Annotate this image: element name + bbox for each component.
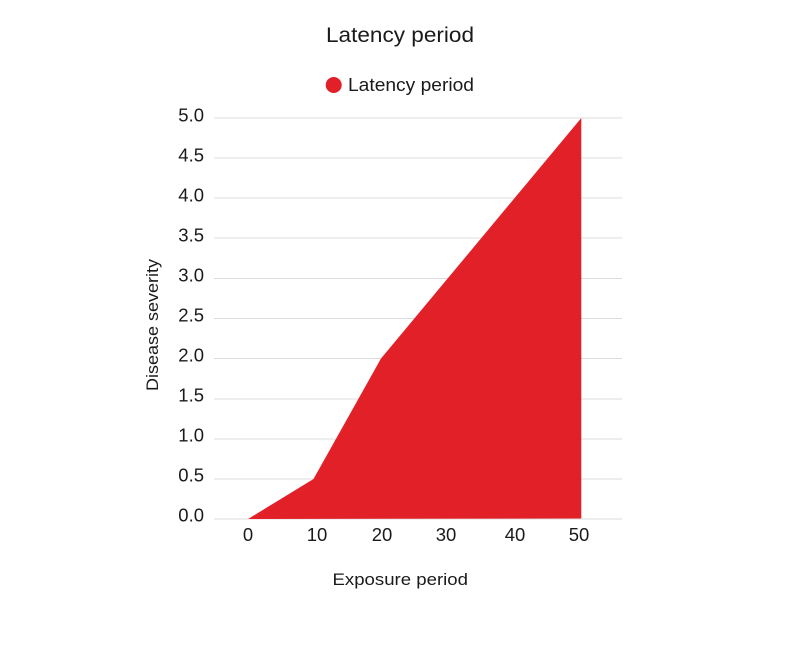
y axis labels: 3.0 [178,264,204,286]
y axis title: Disease severity [143,258,162,391]
y axis labels: 4.5 [178,144,204,166]
title: Latency period [326,24,474,47]
x axis labels: 20 [372,524,392,545]
y axis labels: 0.5 [178,464,204,486]
x axis labels: 10 [307,524,327,545]
y axis labels: 0.0 [178,504,204,526]
y axis labels: 1.5 [178,384,204,406]
y axis labels [178,104,204,526]
y axis labels: 1.0 [178,424,204,446]
y axis labels: 2.5 [178,304,204,326]
y axis labels: 5.0 [178,104,204,126]
y axis labels: 3.5 [178,224,204,246]
x axis labels: 0 [243,524,253,545]
x axis labels [243,524,589,545]
x axis labels: 40 [505,524,525,545]
legend: Latency period [348,75,474,95]
y axis labels: 4.0 [178,184,204,206]
area chart [248,118,581,519]
x axis labels: 30 [436,524,456,545]
y axis labels: 2.0 [178,344,204,366]
x axis labels: 50 [569,524,589,545]
x axis title: Exposure period [332,570,468,589]
